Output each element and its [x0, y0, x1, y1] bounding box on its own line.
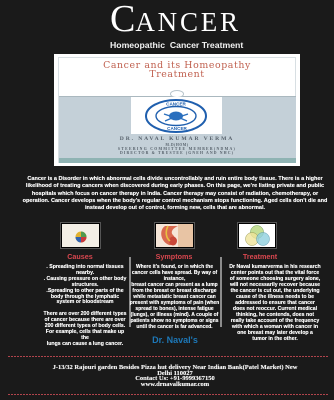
text: treatment: with which a woman with cancer in	[232, 324, 318, 330]
text: treatment: the cancer is cut out, the underlying	[230, 288, 320, 294]
doctor credentials: DR. NAVAL KUMAR VERMA	[120, 136, 234, 142]
text: causes: lungs can cause a lung cancer.	[47, 341, 123, 347]
text: causes: .Spreading to other parts of the	[46, 288, 124, 294]
slide inner frame	[58, 57, 296, 163]
slide body band	[59, 96, 296, 158]
text: causes: of cancer because there are over	[44, 317, 126, 323]
text: causes: . Spreading into normal tissues	[46, 264, 124, 270]
doctor credentials: DIRECTOR & TRUSTEE (GNEH AND NHC)	[120, 151, 234, 155]
logo: cancer crab: CANCER	[166, 102, 187, 106]
text: symptoms: instance,	[164, 276, 185, 282]
text: symptoms: (lungs), or illness (mind). A couple of	[131, 312, 218, 318]
text: symptoms	[130, 264, 220, 330]
text: treatment: thinking, he contends, does not	[236, 312, 314, 318]
text: symptoms: spread to bones), intense fatigue	[135, 306, 214, 312]
text: treatment: center points out that the vital force	[231, 270, 319, 276]
panel: presentation slide	[54, 54, 300, 166]
heading: treatment: Treatment	[243, 252, 277, 261]
footer contact: Contact Us: +91-9999367150	[135, 375, 215, 382]
intro paragraph: likelihood of treating cancers when discovered during early phases. On this page, we're listing private and public	[26, 183, 324, 189]
divider: right column	[220, 257, 222, 327]
text: symptoms: present with symptoms of pain (when	[130, 300, 219, 306]
text: symptoms: from the breast or breast discharge	[132, 288, 217, 294]
text: treatment: Dr Naval kumarverma in his research	[229, 264, 321, 270]
thumbnail: causes pie chart	[61, 223, 100, 248]
text: treatment: does not reoccur. Current medical	[233, 306, 317, 312]
thumbnail: symptoms anatomy	[155, 223, 194, 248]
text: treatment: tumor in the other.	[252, 336, 298, 342]
heading: symptoms: Symptoms	[156, 252, 192, 261]
slide heading	[103, 60, 251, 80]
logo: cancer crab: CANCER	[167, 126, 188, 131]
intro paragraph: hospitals which focus on cancer therapy in India. Cancer therapy may consist of radiation, chemotherapy, or	[32, 191, 318, 197]
brand: Dr. Naval's: Dr. Naval's	[152, 335, 198, 345]
heading: causes: Causes	[67, 252, 93, 261]
slide ornament ring	[170, 90, 184, 98]
text: symptoms: cancer cells have spread. By way of	[132, 270, 217, 276]
intro paragraph: Cancer is a Disorder in which abnormal cells divide uncontrollably and ruin entire body tissue. There is a higher	[27, 176, 323, 182]
text: treatment: addressed to ensure that cancer	[235, 300, 315, 306]
thumbnail: treatment venn diagram	[238, 223, 276, 248]
intro paragraph: instead develop out of control, forming new, cells that are abnormal.	[85, 205, 265, 211]
intro paragraph: operation. Cancer develops when the body's regular control mechanism stops functioning. Aged cells don't die and	[23, 198, 327, 204]
text: causes: system or bloodstream	[56, 299, 114, 305]
text: treatment: will not necessarily recover because	[230, 282, 320, 288]
text: causes: 200 different types of body cells.	[45, 323, 125, 329]
text: symptoms: while metastatic breast cancer can	[133, 294, 216, 300]
slide teal footer band	[59, 158, 296, 163]
text: symptoms: Where it's found, or in which the	[136, 264, 213, 270]
text: causes: the	[81, 335, 89, 341]
footer contact	[52, 364, 298, 388]
slide heading: Cancer and its Homeopathy	[103, 60, 251, 70]
text: treatment: one breast may later develop a	[237, 330, 313, 336]
text: causes: structures.	[72, 282, 98, 288]
text: causes: . Causing pressure on other body	[44, 276, 126, 282]
doctor credentials: M.D(HOM)	[165, 142, 189, 146]
text: symptoms: patients show no symptoms or signs	[130, 318, 219, 324]
intro paragraph	[22, 176, 328, 211]
text: treatment: of someone choosing surgery alone,	[230, 276, 320, 282]
divider: left column	[129, 257, 131, 327]
doctor credentials: STEERING COMMITTEE MEMBER(NDMA)	[118, 146, 236, 150]
text: symptoms: breast cancer can present as a lump	[131, 282, 218, 288]
footer contact: www.drnavalkumar.com	[141, 381, 209, 388]
slide heading: Treatment	[149, 69, 205, 80]
text: causes: nearby.	[76, 270, 94, 276]
footer contact: J-13/32 Rajouri garden Besides Pizza hut delivery Near Indian Bank(Patel Market) New	[53, 364, 297, 371]
text: treatment: cause of the illness needs to be	[236, 294, 314, 300]
text: treatment	[229, 264, 321, 342]
text: causes	[43, 264, 127, 347]
text: treatment: really take account of the frequency	[231, 318, 319, 324]
text: causes: For example, cells that make up	[46, 329, 124, 335]
subtitle: Homeopathic Cancer Treatment	[110, 40, 243, 50]
text: symptoms: until the cancer is far advanced.	[136, 324, 213, 330]
doctor credentials	[118, 136, 236, 155]
logo: cancer crab	[131, 97, 222, 134]
footer contact: Delhi 110027	[157, 370, 193, 377]
text: causes: There are over 200 different types	[43, 311, 127, 317]
text: causes: body through the lymphatic	[51, 294, 119, 300]
